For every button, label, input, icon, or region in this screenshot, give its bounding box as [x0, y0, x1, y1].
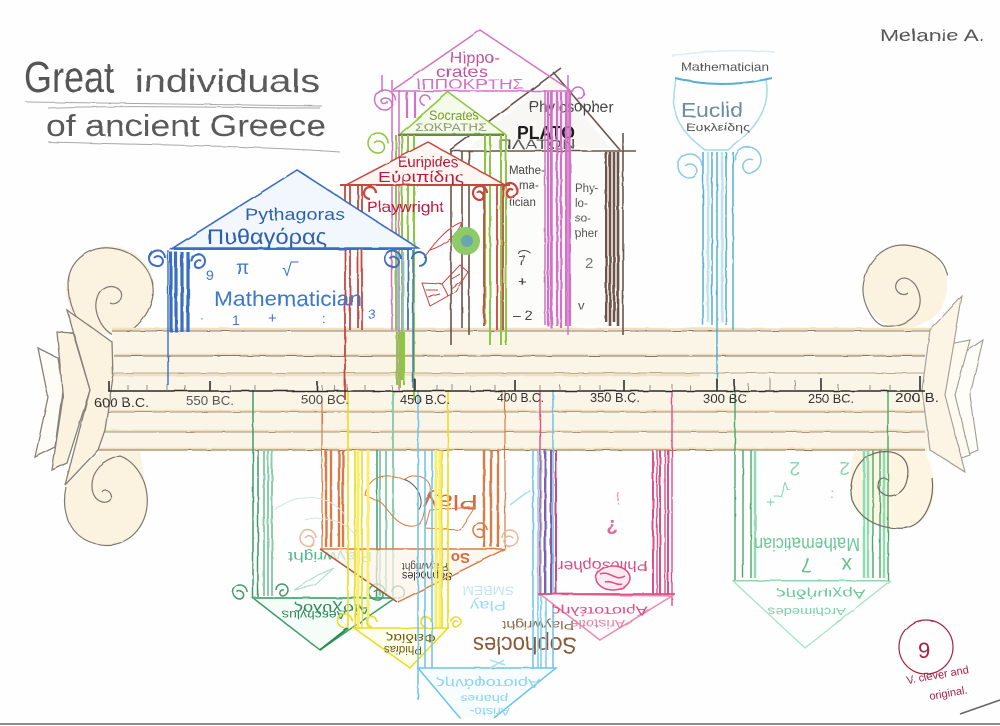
temple: Plato: [450, 68, 636, 345]
temple inverted: Aeschylus: [233, 390, 404, 650]
inverted labels: Sophocles: [402, 569, 452, 583]
inverted labels: Αριστοφάνης: [436, 676, 540, 691]
temple: Socrates: ΣΩΚΡΑΤΗΣ: [415, 122, 487, 134]
icon: open book: [422, 265, 468, 306]
teacher grade: V. clever and: [905, 664, 970, 687]
inverted labels: Philosopher: [558, 557, 648, 574]
volutes: [233, 585, 247, 599]
inverted labels: Phidias: [384, 643, 422, 655]
title: individuals: [135, 63, 320, 99]
teacher grade: [899, 620, 970, 703]
timeline labels: 200 B.: [895, 390, 939, 405]
names: Ευκλείδης: [686, 122, 750, 134]
end pieces: left: [35, 310, 113, 485]
roof: [346, 142, 505, 185]
beam: horizontal capital with timeline: [98, 329, 932, 452]
scroll: bottom left: [65, 452, 147, 545]
columns: [345, 185, 503, 400]
timeline labels: 550 BC.: [186, 393, 234, 408]
volutes: [300, 530, 316, 546]
label: Plato: ma-: [519, 180, 539, 192]
roof: [320, 549, 505, 602]
inverted labels: Play: [470, 598, 506, 614]
name: 1: [232, 312, 240, 328]
label: Plato: 2: [585, 255, 593, 272]
columns: [382, 75, 572, 390]
name: √‾: [282, 260, 299, 280]
name: Mathematician: [214, 288, 362, 311]
name: :: [322, 311, 326, 326]
volutes: [338, 614, 352, 628]
icon: quill and inkwell: [424, 222, 462, 258]
inverted labels and symbols: Αρχιμήδης: [776, 587, 866, 601]
title: [24, 53, 340, 152]
roof: [540, 594, 672, 640]
names: [681, 60, 769, 134]
temple inverted: Aristotle: [538, 390, 675, 640]
temple inverted: Phidias: [338, 390, 461, 668]
bowl: [673, 79, 767, 150]
inverted labels: Playwright: [402, 560, 448, 572]
roof: [400, 92, 505, 134]
name: Πυθαγόρας: [207, 226, 327, 249]
label: Plato: v: [578, 298, 585, 313]
timeline labels: [94, 390, 939, 410]
temple: Pythagoras: [149, 170, 426, 388]
inverted labels: [552, 488, 648, 629]
label: Plato: – 2: [513, 307, 533, 323]
name and role: Euripides: [398, 154, 458, 171]
drop lines and columns: [253, 390, 377, 598]
major ticks: [109, 376, 920, 391]
inverted labels: Φειδίας: [385, 631, 436, 643]
temple: Euclid (goblet): [672, 51, 775, 388]
name: π: [236, 258, 249, 279]
inverted labels: Aristotle: [570, 617, 625, 629]
inverted labels: Aristo-: [470, 705, 510, 717]
columns: [451, 133, 623, 345]
inverted labels and symbols: Mathematician: [754, 534, 860, 554]
volutes: [364, 187, 376, 199]
name: Pythagoras: [245, 205, 345, 224]
timeline labels: 350 B.C.: [590, 390, 640, 405]
scrolls: capital volutes: [65, 244, 947, 545]
name and role: [367, 154, 464, 216]
temple: Euripides: [340, 142, 517, 400]
label: Plato: 7: [518, 252, 526, 268]
inverted labels and symbols: :: [830, 486, 834, 503]
inverted labels: ?: [606, 515, 618, 537]
roof: [354, 628, 448, 668]
inverted labels: [384, 631, 436, 655]
label: Plato: lo-: [575, 198, 588, 210]
roof: [253, 598, 395, 650]
volutes: [375, 90, 395, 110]
inverted labels: Αριστοτέλης: [552, 604, 648, 618]
symbols: 9: [206, 267, 214, 283]
drop lines and columns: [322, 390, 505, 548]
scroll: top right: [863, 244, 947, 328]
label: Plato: +: [518, 273, 526, 289]
columns: [396, 135, 506, 400]
scroll overlay: bottom right spiral: [851, 452, 933, 528]
icon: brush marks: [490, 490, 530, 668]
teacher grade: 9: [918, 638, 930, 663]
timeline labels: 250 BC.: [808, 391, 854, 406]
paper edge: [0, 700, 1000, 724]
timeline labels: 500 BC.: [301, 392, 349, 407]
inverted labels: Αἰσχύλος: [294, 601, 370, 617]
temple inverted: Aristophanes: [417, 390, 556, 718]
label: Plato: pher: [575, 228, 598, 240]
name: [200, 205, 376, 328]
column: [703, 152, 733, 388]
inverted labels and symbols: 7: [801, 553, 812, 575]
teacher grade: original.: [928, 684, 968, 703]
inverted labels: phanes: [459, 692, 508, 704]
columns: [540, 390, 672, 606]
inverted labels: [402, 490, 577, 658]
inverted labels and symbols: x: [841, 553, 852, 576]
inverted labels and symbols: Archimedes: [767, 605, 846, 617]
label: Plato: ΠΛΑΤΩΝ: [498, 136, 576, 152]
label: Plato: [498, 99, 614, 323]
volutes: [149, 250, 165, 266]
name: 3: [368, 306, 376, 322]
inverted labels and symbols: 2: [789, 457, 800, 478]
inverted labels and symbols: 2: [839, 457, 850, 478]
roof: [173, 170, 418, 248]
columns: [735, 390, 888, 580]
name: ·: [200, 311, 204, 325]
title: of ancient Greece: [46, 108, 326, 143]
name: crates: [436, 64, 488, 81]
scroll: bottom right fill: [850, 452, 934, 527]
volute: [368, 133, 388, 153]
temple: Hippocrates: [375, 30, 584, 390]
timeline labels: 300 BC: [703, 391, 747, 406]
icon: theatre scene sketch: [365, 476, 475, 530]
inverted labels: Playwright: [501, 618, 574, 632]
minor ticks: [128, 378, 890, 391]
title: Great: [24, 53, 114, 102]
timeline labels: 400 B.C.: [497, 390, 544, 405]
inverted labels and symbols: √‾: [773, 478, 790, 498]
timeline: axis with ticks: [108, 376, 925, 391]
inverted labels: [282, 549, 372, 622]
inverted labels: So: [451, 549, 470, 566]
name: +: [268, 310, 277, 327]
inverted labels: Playwright: [288, 549, 372, 565]
author name: Melanie A.: [880, 26, 985, 45]
label: Plato: tician: [509, 197, 536, 209]
icon: globe: [596, 566, 630, 590]
end pieces: right: [922, 296, 983, 472]
names: Mathematician: [681, 60, 769, 74]
names: Euclid: [681, 100, 743, 122]
inverted labels and symbols: +: [766, 493, 775, 510]
inverted labels: SMBEM: [462, 583, 514, 598]
inverted labels and symbols: [754, 457, 866, 617]
volutes: [678, 154, 702, 178]
inverted labels: Aeschylus: [282, 608, 346, 622]
columns: [168, 250, 413, 388]
roof: [733, 581, 890, 648]
scroll: top left: [66, 246, 154, 335]
temple inverted: Archimedes: [733, 390, 890, 648]
label: Plato: Phy-: [575, 183, 599, 195]
label: Plato: so-: [575, 213, 591, 225]
columns: [348, 390, 448, 628]
inverted labels: i: [616, 488, 620, 507]
name: ΙΠΠΟΚΡΤΗΣ: [416, 76, 524, 93]
name: [416, 50, 524, 93]
name and role: Playwright: [367, 199, 445, 216]
roof: [417, 668, 556, 718]
timeline labels: 600 B.C.: [94, 395, 149, 410]
temple: Socrates: [368, 92, 506, 400]
columns: [418, 390, 553, 700]
roof: [470, 78, 610, 148]
inverted labels: Sophocles: [473, 631, 577, 658]
name: Socrates: [429, 107, 479, 123]
name: Hippo-: [450, 50, 500, 67]
inverted labels: [436, 583, 540, 717]
label: Plato: Phylosopher: [529, 99, 614, 116]
icon: quill: [294, 568, 334, 590]
inverted labels: Play: [422, 490, 478, 513]
timeline labels: 450 B.C.: [400, 392, 450, 407]
label: Plato: Mathe-: [509, 165, 545, 177]
roof: [393, 30, 570, 90]
name and role: Εύριπίδης: [378, 169, 464, 186]
temple inverted: Sophocles: [275, 390, 577, 658]
label: Plato: ⌒: [517, 249, 531, 265]
label: Plato: PLATO: [517, 123, 575, 143]
